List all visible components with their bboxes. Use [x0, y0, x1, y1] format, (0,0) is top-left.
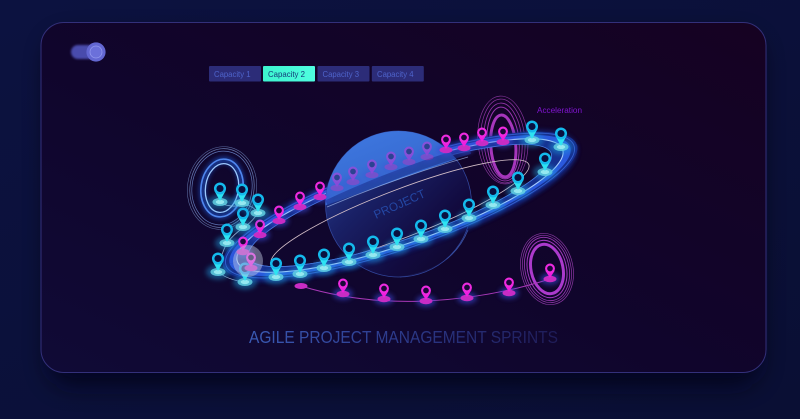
bottom right concentric target rings [514, 228, 580, 310]
orbit ring front layer [222, 144, 580, 283]
acceleration label: Acceleration [537, 106, 582, 115]
toggle switch [71, 42, 106, 62]
tab: Capacity 1 [209, 66, 261, 82]
main panel [41, 22, 766, 372]
tab: Capacity 4 [372, 66, 424, 82]
connector lines [218, 203, 550, 301]
back orbit pins right and left of planet [233, 128, 513, 258]
tab: Capacity 1: Capacity 1 [214, 69, 251, 79]
back orbit pins seen through planet [327, 143, 437, 194]
tab: Capacity 3: Capacity 3 [322, 69, 359, 79]
tab: Capacity 2 active: Capacity 2 [268, 69, 305, 79]
orbit ring back layer [209, 103, 591, 308]
planet [326, 131, 472, 277]
inner pale orbit line [263, 142, 537, 286]
tab: Capacity 4: Capacity 4 [377, 69, 414, 79]
tab: Capacity 3 [318, 66, 370, 82]
title: AGILE PROJECT MANAGEMENT SPRINTS [249, 327, 558, 347]
planet label: PROJECT [372, 186, 428, 222]
top right concentric target rings [475, 94, 531, 186]
left concentric target rings [182, 142, 262, 234]
glass progress marker [233, 245, 263, 277]
front orbit cyan pins [206, 122, 573, 290]
magenta pin inside glass marker [241, 254, 261, 274]
lower path magenta pins [294, 265, 560, 307]
tab: Capacity 2 active [263, 66, 315, 82]
panel shadow [48, 36, 760, 386]
ring band crossing planet [327, 150, 470, 207]
capacity selector tabs [209, 66, 424, 82]
